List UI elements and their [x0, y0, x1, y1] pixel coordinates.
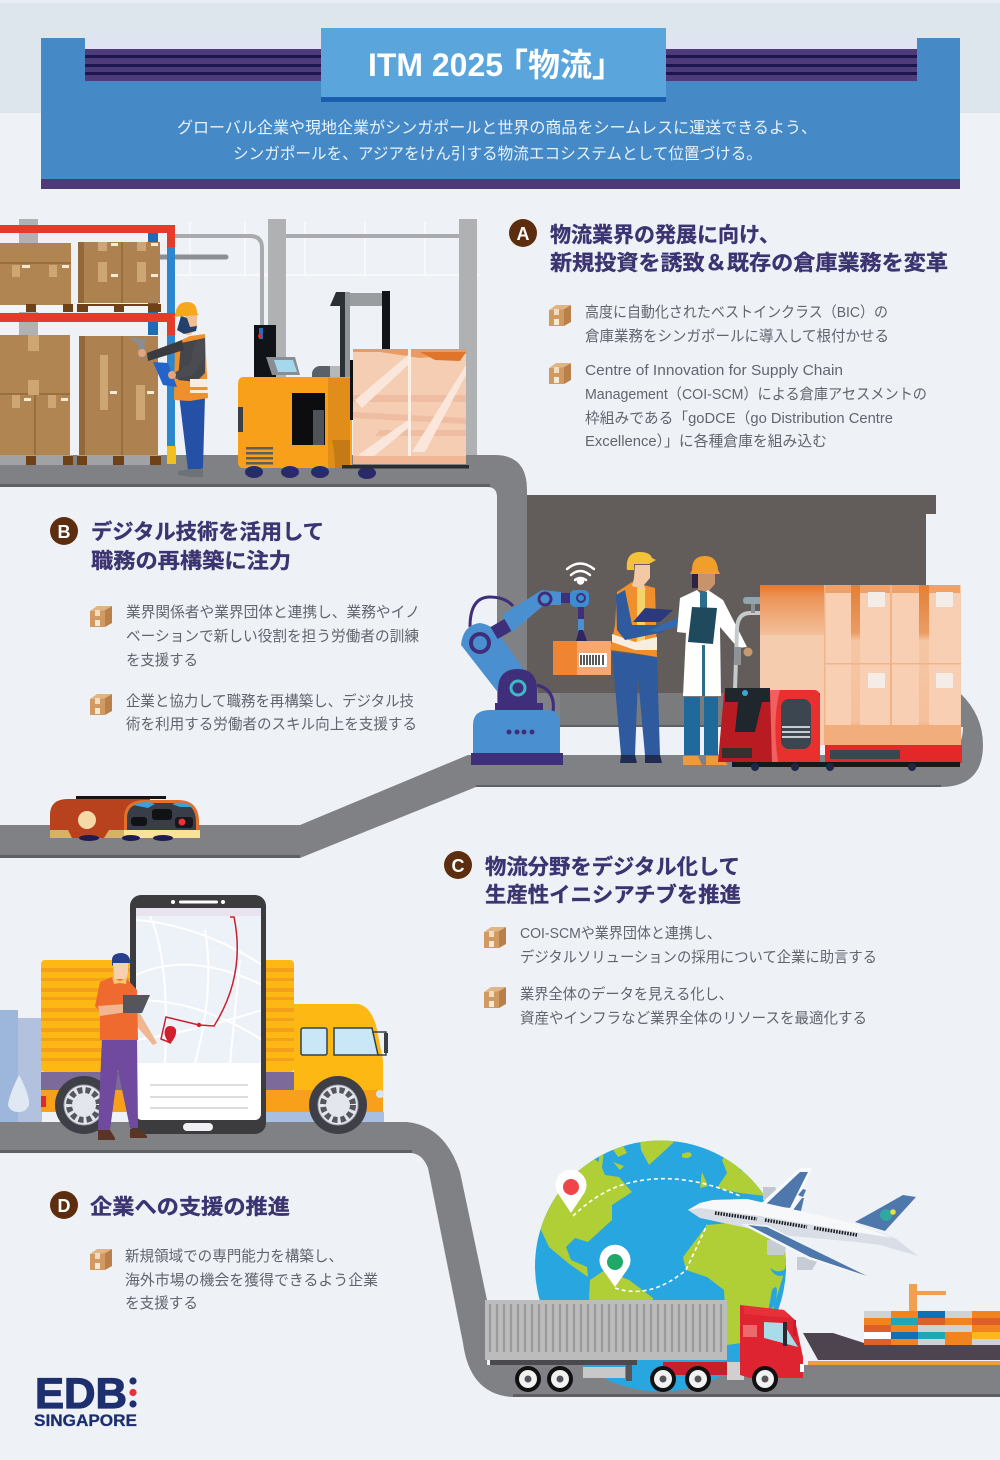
heading B — [91, 520, 324, 573]
parcel with barcode — [553, 641, 611, 675]
container truck — [485, 1300, 804, 1392]
bullet B1: ベーションで新しい役割を担う労働者の訓練 — [126, 628, 419, 645]
warehouse backdrop — [19, 219, 480, 459]
mast and tower — [254, 291, 390, 465]
section D — [50, 1191, 378, 1312]
pallet truck handle — [734, 597, 768, 690]
road shading — [0, 484, 1000, 1397]
header description: グローバル企業や現地企業がシンガポールと世界の商品をシームレスに運送できるよう、 — [177, 119, 817, 137]
title box — [321, 28, 666, 102]
section B — [50, 517, 420, 733]
worker with scanner — [130, 302, 208, 477]
header description: シンガポールを、アジアをけん引する物流エコシステムとして位置づける。 — [233, 145, 762, 163]
wifi icon — [567, 564, 594, 584]
heading B: 職務の再構築に注力 — [91, 550, 291, 573]
bullet B1 — [90, 604, 420, 669]
small delivery robot — [50, 796, 200, 841]
heading B: デジタル技術を活用して — [91, 520, 324, 544]
bullet D1: 新規領域での専門能力を構築し、 — [125, 1247, 343, 1265]
badge D — [50, 1191, 78, 1219]
smartphone with map — [130, 895, 266, 1134]
bullet C1: デジタルソリューションの採用について企業に助言する — [520, 948, 877, 966]
bullet B2 — [90, 692, 417, 733]
badge B — [50, 517, 78, 545]
map route — [161, 917, 237, 1043]
bullet C2 — [484, 985, 867, 1027]
bullet C2: 資産やインフラなど業界全体のリソースを最適化する — [520, 1010, 867, 1027]
worker with tablet — [610, 552, 704, 763]
truck cab — [740, 1305, 804, 1378]
bottom boxes — [0, 335, 161, 465]
europe and asia — [718, 1158, 763, 1196]
header banner — [41, 28, 960, 189]
delivery man with tablet — [95, 953, 157, 1140]
map pin — [165, 1026, 176, 1044]
truck wheels — [55, 1076, 367, 1134]
greenland — [640, 1140, 674, 1165]
bullet D1: を支援する — [125, 1295, 198, 1312]
truck wheels — [515, 1366, 778, 1392]
bullet A2: Excellence）」に各種倉庫を組み込む — [585, 433, 827, 450]
bullet C1: COI-SCMや業界団体と連携し、 — [520, 925, 721, 942]
badge A — [509, 219, 537, 247]
pin: red — [555, 1170, 586, 1213]
delivery truck — [41, 960, 388, 1134]
flight routes — [573, 1179, 740, 1216]
heading C: 物流分野をデジタル化して — [485, 855, 740, 879]
heading C: 生産性イニシアチブを推進 — [485, 883, 741, 907]
wrapped pallet — [353, 349, 466, 464]
islands — [598, 1146, 740, 1188]
clipboard — [153, 362, 177, 387]
header description — [177, 119, 817, 163]
road: lower serpentine — [0, 1122, 1000, 1397]
scientist with clipboard — [677, 556, 752, 765]
heading A — [550, 224, 948, 275]
bullet B2: 術を利用する労働者のスキル向上を支援する — [126, 716, 417, 733]
forklift — [238, 291, 469, 479]
title box: ITM 2025 — [368, 47, 503, 83]
scene A: warehouse shelves — [0, 225, 176, 465]
red robotic cart — [718, 688, 962, 771]
section C — [444, 851, 877, 1027]
containers — [864, 1311, 1000, 1345]
bullet A1: 高度に自動化されたベストインクラス（BIC）の — [585, 304, 888, 321]
robot arm with parcel — [461, 564, 611, 765]
top boxes — [0, 242, 161, 312]
bullet C1 — [484, 925, 877, 966]
bullet A1: 倉庫業務をシンガポールに導入して根付かせる — [585, 328, 889, 345]
bullet C2: 業界全体のデータを見える化し、 — [520, 985, 733, 1003]
bullet D1 — [90, 1247, 378, 1312]
bullet A1 — [549, 304, 889, 345]
north america — [540, 1159, 632, 1277]
bullet B1: 業界関係者や業界団体と連携し、業務やイノ — [126, 604, 420, 621]
EDB Singapore logo: EDB — [35, 1370, 127, 1418]
wrapped pallet on cart — [760, 585, 961, 745]
bullet A2: Centre of Innovation for Supply Chain — [585, 362, 843, 379]
forklift body — [238, 377, 352, 468]
africa — [683, 1222, 795, 1345]
bullet B2: 企業と協力して職務を再構築し、デジタル技 — [126, 692, 414, 710]
airplane — [688, 1168, 918, 1278]
heading A: 新規投資を誘致＆既存の倉庫業務を変革 — [550, 252, 948, 275]
road: upper serpentine — [0, 455, 983, 858]
south america — [589, 1271, 653, 1300]
badge B: B — [58, 522, 70, 542]
heading A: 物流業界の発展に向け、 — [550, 224, 780, 247]
pin: green — [600, 1245, 630, 1287]
bullet A2: Management（COI-SCM）による倉庫アセスメントの — [585, 386, 927, 403]
bullet A2 — [549, 362, 927, 450]
city skyline — [0, 1010, 384, 1122]
EDB Singapore logo: SINGAPORE — [34, 1412, 137, 1430]
badge A: A — [516, 224, 530, 244]
barcode scanner — [130, 337, 146, 358]
badge C — [444, 851, 472, 879]
heading C — [485, 855, 741, 907]
badge D: D — [58, 1196, 70, 1216]
section A — [509, 219, 948, 450]
bullet D1: 海外市場の機会を獲得できるよう企業 — [125, 1272, 378, 1289]
cargo ship — [803, 1284, 1000, 1365]
bullet B1: を支援する — [126, 652, 198, 669]
heading D: 企業への支援の推進 — [90, 1196, 290, 1219]
scene B: warehouse wall — [527, 495, 960, 725]
bullet A2: 枠組みである「goDCE（go Distribution Centre — [585, 410, 893, 427]
title box: 「物流」 — [496, 47, 624, 83]
badge C: C — [452, 856, 464, 876]
globe — [535, 1140, 786, 1392]
